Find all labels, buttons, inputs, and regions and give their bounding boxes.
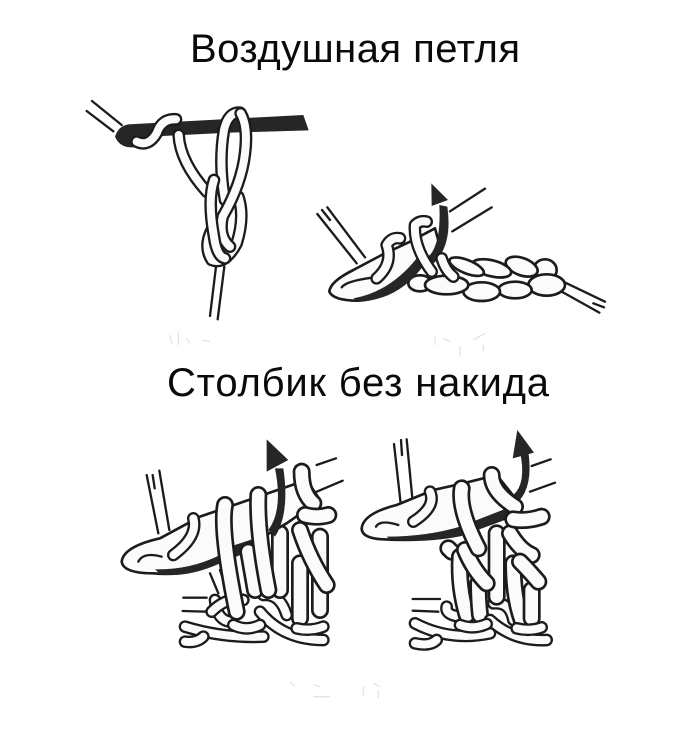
arrowhead (513, 430, 534, 458)
title: single crochet: Столбик без накида (167, 361, 550, 405)
illustration: single crochet, yarn drawn through (362, 430, 555, 698)
arrowhead (267, 439, 288, 472)
base stitches (212, 595, 287, 622)
hook body (329, 228, 440, 301)
title: air loop: Воздушная петля (190, 27, 520, 71)
hook (122, 480, 320, 574)
base stitches (446, 603, 513, 620)
hook (362, 475, 517, 540)
arrowhead (431, 183, 448, 206)
chain stitches (408, 253, 565, 301)
illustration: pulling yarn through a chain (317, 183, 605, 357)
illustration: hook holding a slip knot (87, 101, 309, 345)
illustration: single crochet, hook through stitches (122, 439, 343, 697)
